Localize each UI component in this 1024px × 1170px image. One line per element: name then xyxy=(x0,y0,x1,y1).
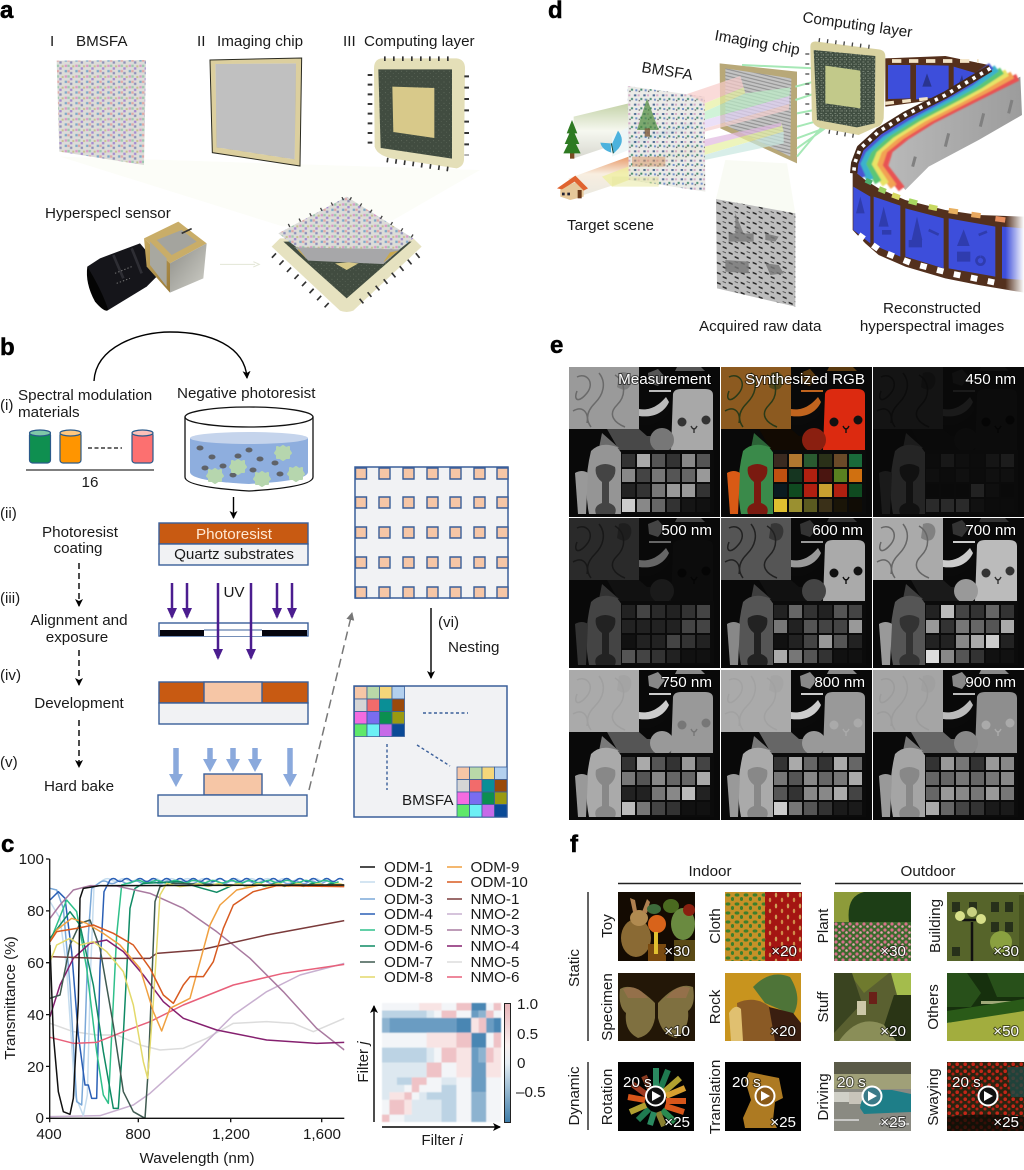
house icon xyxy=(557,176,588,200)
image: 750 nm xyxy=(569,670,720,820)
x tick labels xyxy=(36,1126,341,1143)
label: Computing layer: Computing layer xyxy=(801,9,913,41)
image: 800 nm xyxy=(721,670,872,820)
step: Alignment and exposure: Alignment and xyxy=(30,612,128,629)
green cylinder xyxy=(30,430,50,463)
image: Plant: ×30 xyxy=(880,943,906,960)
image: 800 nm: 800 nm xyxy=(814,674,865,691)
panel label e: e xyxy=(550,332,563,359)
upper film strip xyxy=(885,56,989,107)
image: Stuff: ×20 xyxy=(880,1023,906,1040)
video: Driving xyxy=(834,1062,911,1131)
image: 900 nm xyxy=(873,670,1024,820)
step: Development: Development xyxy=(34,695,125,712)
ODM-9 curve xyxy=(50,885,344,1031)
legend: ODM-3 xyxy=(384,891,433,908)
step iii label: (iii) xyxy=(0,590,20,607)
bracket line xyxy=(26,469,154,471)
panel b: fabrication flow xyxy=(0,332,508,817)
video: Driving: ×25 xyxy=(880,1114,906,1131)
arrow to coating xyxy=(232,497,234,518)
ODM-2 curve xyxy=(50,879,327,1116)
grey back of film xyxy=(887,77,1022,190)
photoresist beaker xyxy=(185,407,313,491)
heatmap axes xyxy=(374,1006,500,1127)
ODM-4 curve xyxy=(50,878,343,1098)
ODM-8 curve xyxy=(50,883,343,1078)
video: Translation: ×25 xyxy=(770,1114,796,1131)
image: Cloth: ×20 xyxy=(771,943,797,960)
image: Plant xyxy=(834,892,911,961)
step ii label: (ii) xyxy=(0,505,17,522)
legend: ODM-2 xyxy=(384,874,433,891)
line chart curves xyxy=(50,878,345,1118)
step: Photoresist coating: Photoresist xyxy=(42,524,118,541)
hyperspectral camera xyxy=(87,222,207,311)
legend: NMO-4 xyxy=(470,938,519,955)
y tick labels: 0 xyxy=(36,1110,44,1127)
header rules xyxy=(588,884,1023,1130)
x tick labels: 1,200 xyxy=(212,1126,250,1143)
y tick labels: 20 xyxy=(27,1059,44,1076)
heading: III Computing layer: Computing layer xyxy=(364,33,475,50)
dashed arrow 2 xyxy=(78,650,80,685)
legend: ODM-1 xyxy=(384,859,433,876)
step i label: (i) xyxy=(0,397,14,414)
axes xyxy=(46,859,344,1122)
label: Spectral modulation materials: Spectral modulation xyxy=(18,387,152,404)
patterned wafer xyxy=(355,467,508,598)
colour bar: 1.0 xyxy=(517,996,538,1013)
colour bar: –0.5 xyxy=(516,1084,546,1101)
category: Swaying: Swaying xyxy=(925,1068,942,1126)
step v label: (v) xyxy=(0,754,18,771)
image: 500 nm: 500 nm xyxy=(661,522,712,539)
row label: Dynamic: Dynamic xyxy=(566,1066,583,1126)
panel a: sensor components xyxy=(0,0,480,312)
video: Swaying: 20 s xyxy=(952,1074,981,1091)
computing layer chip in perspective xyxy=(807,40,885,137)
legend: NMO-6 xyxy=(470,969,519,986)
butterfly light cone xyxy=(612,127,629,157)
video: Driving: 20 s xyxy=(837,1074,866,1091)
legend: NMO-5 xyxy=(470,954,519,971)
y tick labels: 60 xyxy=(27,955,44,972)
heading: Hyperspecl sensor: Hyperspecl sensor xyxy=(45,205,171,222)
step: Photoresist coating: coating xyxy=(54,540,102,557)
colour bar: 0.5 xyxy=(517,1026,538,1043)
label: Target scene: Target scene xyxy=(567,217,654,234)
arrow to assembled sensor xyxy=(220,262,259,267)
image: Specimen: ×10 xyxy=(664,1023,690,1040)
hard bake arrows xyxy=(176,748,290,775)
scene beams through filter xyxy=(602,143,705,187)
dots between cylinders xyxy=(88,447,122,449)
red cylinder xyxy=(132,430,153,463)
category: Rock: Rock xyxy=(707,989,724,1024)
glow above raw data xyxy=(716,160,795,213)
image: Measurement xyxy=(569,367,720,517)
ODM-1 curve xyxy=(50,885,344,1114)
BMSFA mosaic xyxy=(354,686,507,817)
overlaid scene on filter xyxy=(612,98,665,187)
ODM-5 curve xyxy=(50,880,339,1103)
panel label c: c xyxy=(1,831,14,858)
label: Negative photoresist: Negative photoresist xyxy=(177,385,316,402)
category: Stuff: Stuff xyxy=(815,991,832,1022)
orange cylinder xyxy=(60,430,81,463)
panel d: imaging pipeline xyxy=(548,0,1024,335)
NMO-2 curve xyxy=(50,963,344,1117)
video: Translation: 20 s xyxy=(732,1074,761,1091)
particles xyxy=(196,446,300,480)
acquired raw data image xyxy=(716,199,795,307)
category: Driving: Driving xyxy=(815,1073,832,1121)
heading: II Imaging chip: Imaging chip xyxy=(217,33,303,50)
ODM-10 curve xyxy=(50,886,344,1003)
heading: I BMSFA: I xyxy=(50,33,54,50)
image: 500 nm xyxy=(569,518,720,668)
NMO-1 curve xyxy=(50,921,344,958)
y tick labels: 100 xyxy=(19,851,44,868)
dashed arrow 3 xyxy=(78,720,80,767)
panel label f: f xyxy=(570,831,579,858)
panel e: spectral images xyxy=(550,332,1024,820)
UV arrows xyxy=(172,583,292,658)
film edge with sprocket holes xyxy=(854,68,990,173)
category: Others: Others xyxy=(925,984,942,1030)
image: 600 nm: 600 nm xyxy=(812,522,863,539)
legend: ODM-5 xyxy=(384,922,433,939)
developed layer xyxy=(159,682,308,724)
UV label: UV xyxy=(223,584,245,601)
tree light cone xyxy=(574,103,629,158)
category: Toy: Toy xyxy=(599,914,616,938)
y axis title: Transmittance (%) xyxy=(2,936,19,1060)
coated substrate: Quartz substrates xyxy=(174,546,294,563)
y tick labels: 40 xyxy=(27,1007,44,1024)
heading: III Computing layer: III xyxy=(343,33,356,50)
Filter i label: Filter i xyxy=(421,1132,463,1149)
drawings of panel d xyxy=(557,40,1024,307)
baked layer xyxy=(158,774,307,816)
imaging chip in perspective xyxy=(720,63,797,163)
image: 450 nm: 450 nm xyxy=(965,371,1016,388)
image: Others: ×50 xyxy=(993,1023,1019,1040)
imaging chip xyxy=(210,58,302,166)
assembled sensor stack xyxy=(272,197,422,312)
NMO-3 curve xyxy=(50,886,344,1050)
mask xyxy=(159,623,308,636)
image: Stuff xyxy=(834,973,911,1041)
step iv label: (iv) xyxy=(0,667,21,684)
image: Toy xyxy=(618,892,695,961)
label: Acquired raw data: Acquired raw data xyxy=(699,318,822,335)
drawings of panel a xyxy=(57,58,480,312)
nesting arrow xyxy=(430,608,432,678)
category: Rotation: Rotation xyxy=(599,1069,616,1125)
lower film strip xyxy=(853,170,1024,293)
video: Rotation: ×25 xyxy=(664,1114,690,1131)
legend: ODM-7 xyxy=(384,954,433,971)
image: Toy: ×30 xyxy=(664,943,690,960)
stars xyxy=(207,446,304,486)
step: Hard bake: Hard bake xyxy=(44,778,114,795)
curved arrow from materials to photoresist xyxy=(94,332,247,381)
legend: NMO-2 xyxy=(470,906,519,923)
panel label b: b xyxy=(0,334,15,361)
image: 700 nm xyxy=(873,518,1024,668)
BMSFA filter xyxy=(628,86,705,192)
image: 700 nm: 700 nm xyxy=(965,522,1016,539)
image: Rock: ×20 xyxy=(770,1023,796,1040)
image: Building: ×30 xyxy=(993,943,1019,960)
image: 450 nm xyxy=(873,367,1024,517)
y tick labels: 80 xyxy=(27,903,44,920)
dashed grey arrow xyxy=(309,613,352,790)
video: Swaying xyxy=(947,1062,1024,1131)
label: Spectral modulation materials: materials xyxy=(18,404,80,421)
heading: I BMSFA: BMSFA xyxy=(76,33,128,50)
video: Translation xyxy=(725,1062,801,1131)
image: 750 nm: 750 nm xyxy=(661,674,712,691)
correlation heatmap xyxy=(382,1003,501,1122)
bottom-right tile xyxy=(457,767,507,817)
legend: ODM-4 xyxy=(384,906,433,923)
colour bar xyxy=(504,996,546,1122)
legend: ODM-10 xyxy=(470,874,528,891)
image: Rock xyxy=(725,973,801,1041)
green lines to computing layer xyxy=(742,65,865,157)
dashed arrow 1 xyxy=(78,563,80,606)
label: Reconstructed hyperspectral images: hyperspectral images xyxy=(860,318,1005,335)
image: Specimen xyxy=(618,973,695,1041)
projection glow xyxy=(60,157,480,227)
coated substrate xyxy=(159,523,308,565)
NMO-4 curve xyxy=(50,940,344,1043)
legend: NMO-3 xyxy=(470,922,519,939)
label: Imaging chip: Imaging chip xyxy=(713,27,801,59)
header: Outdoor: Outdoor xyxy=(901,863,955,880)
Filter j label: Filter j xyxy=(355,1041,372,1083)
step: Alignment and exposure: exposure xyxy=(46,629,108,646)
label: BMSFA: BMSFA xyxy=(402,792,454,809)
legend: ODM-9 xyxy=(470,859,519,876)
category: Specimen: Specimen xyxy=(599,973,616,1041)
coated substrate: Photoresist xyxy=(196,526,273,543)
category: Building: Building xyxy=(927,899,944,953)
colour bar: 0 xyxy=(517,1055,525,1072)
butterfly icon xyxy=(600,131,622,153)
legend: NMO-1 xyxy=(470,891,519,908)
image: 900 nm: 900 nm xyxy=(965,674,1016,691)
heading: II Imaging chip: II xyxy=(197,33,205,50)
video: Rotation xyxy=(618,1062,694,1131)
category: Plant: Plant xyxy=(815,908,832,943)
legend xyxy=(360,859,528,986)
image: Measurement: Measurement xyxy=(618,371,712,388)
category: Translation: Translation xyxy=(707,1060,724,1134)
legend: ODM-8 xyxy=(384,969,433,986)
label: Reconstructed hyperspectral images: Reconstructed xyxy=(883,300,981,317)
material cylinders xyxy=(30,430,153,463)
ODM-7 curve xyxy=(50,883,233,1118)
video: Rotation: 20 s xyxy=(623,1074,652,1091)
house light cone xyxy=(569,157,629,200)
NMO-5 curve xyxy=(50,1018,344,1050)
x axis title: Wavelength (nm) xyxy=(139,1150,255,1167)
x tick labels: 1,600 xyxy=(303,1126,341,1143)
NMO-6 curve xyxy=(50,964,344,1043)
header: Indoor: Indoor xyxy=(688,863,732,880)
image: Building xyxy=(947,892,1024,961)
label: Nesting: Nesting xyxy=(448,639,500,656)
label: BMSFA: BMSFA xyxy=(640,59,695,84)
row label: Static: Static xyxy=(566,949,583,987)
x tick labels: 800 xyxy=(125,1126,151,1143)
video: Swaying: ×25 xyxy=(993,1114,1019,1131)
y tick labels xyxy=(19,851,44,1127)
ODM-3 curve xyxy=(50,881,332,1105)
image: Synthesized RGB xyxy=(721,367,872,517)
count 16: 16 xyxy=(82,474,98,491)
step vi label: (vi) xyxy=(438,614,459,631)
panel c: transmittance chart xyxy=(1,831,546,1167)
rainbow ribbon xyxy=(856,66,1018,189)
spectral beams to chip xyxy=(687,76,790,160)
image: Cloth xyxy=(725,892,802,961)
BMSFA filter sheet xyxy=(57,60,146,165)
image: Others xyxy=(947,973,1024,1041)
top-left tile xyxy=(354,686,404,736)
category: Cloth: Cloth xyxy=(707,908,724,944)
image: Synthesized RGB: Synthesized RGB xyxy=(745,371,865,388)
panel f: dataset overview xyxy=(566,831,1024,1134)
ODM-6 curve xyxy=(50,882,345,1108)
computing layer chip xyxy=(370,58,467,169)
tree icon xyxy=(563,120,581,159)
image: 600 nm xyxy=(721,518,872,668)
x tick labels: 400 xyxy=(36,1126,62,1143)
legend: ODM-6 xyxy=(384,938,433,955)
